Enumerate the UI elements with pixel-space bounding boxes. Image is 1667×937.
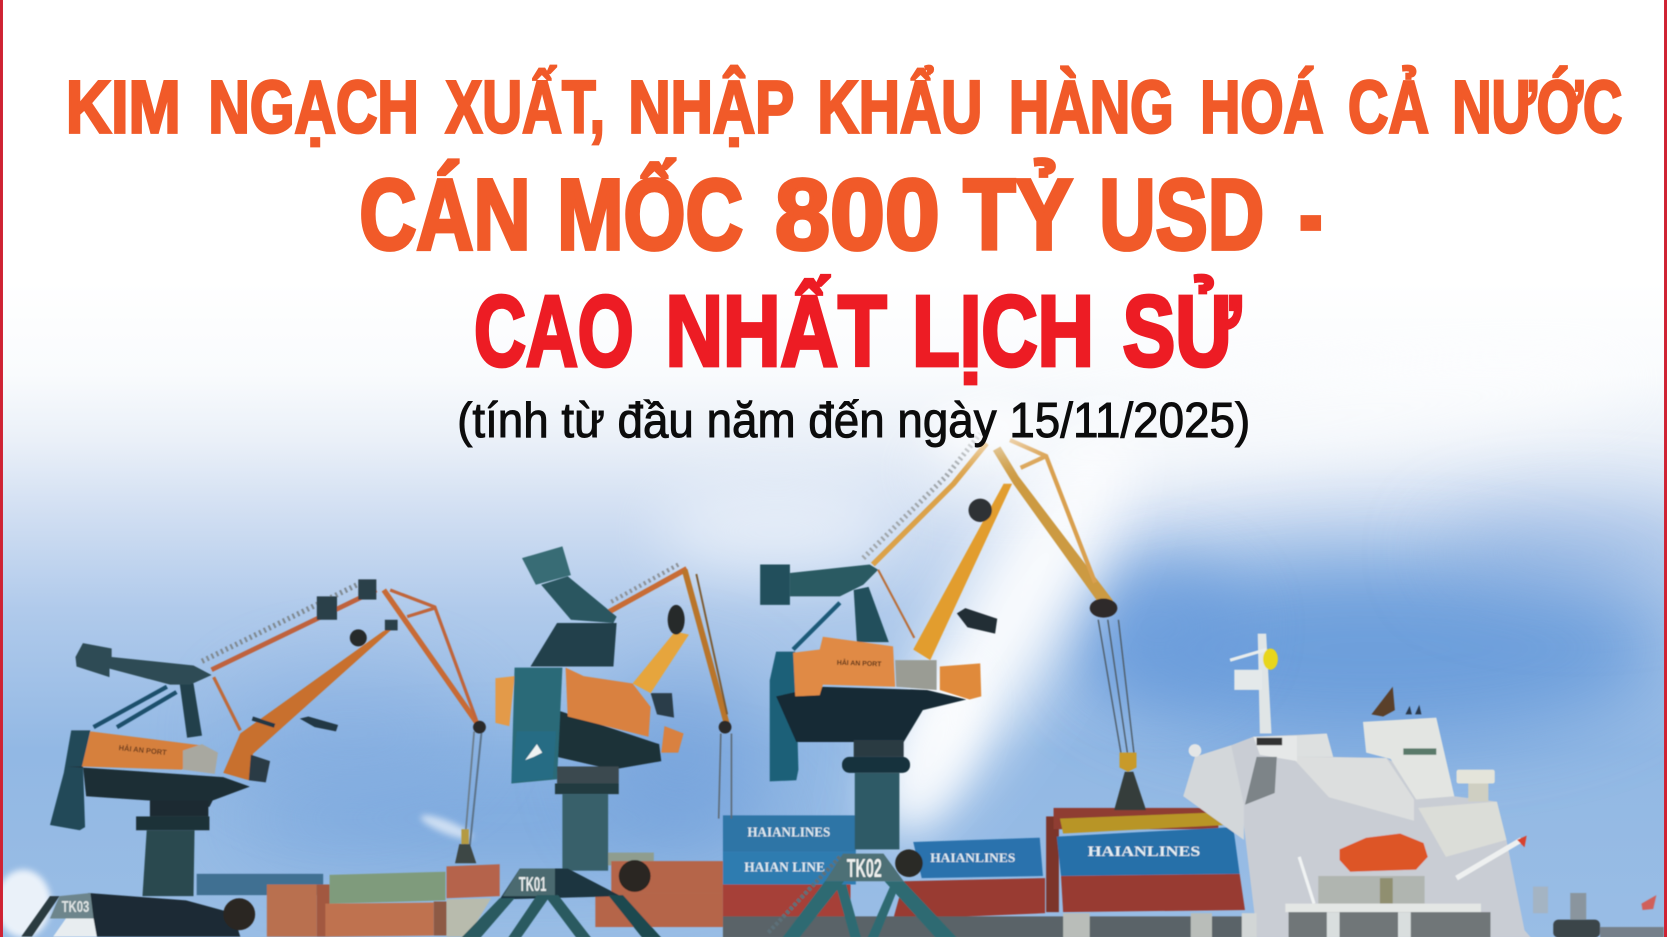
haze over crane tip xyxy=(928,402,1045,453)
title line 1: HÀNG xyxy=(1009,65,1174,148)
title line 2 xyxy=(359,159,1323,271)
title line 1 xyxy=(66,65,1622,148)
title line 1: NGẠCH xyxy=(208,65,419,148)
date subtitle: (tính từ đầu năm đến ngày 15/11/2025) xyxy=(457,394,1250,448)
title line 3: SỬ xyxy=(1123,276,1241,388)
title line 3: CAO xyxy=(474,277,634,388)
title line 2: - xyxy=(1299,160,1323,271)
title line 1: KHẨU xyxy=(818,65,982,148)
title line 2: CÁN xyxy=(359,159,531,271)
crane 2 xyxy=(461,546,731,937)
title line 1: XUẤT, xyxy=(445,65,605,148)
title line 1: HOÁ xyxy=(1200,65,1324,148)
containers and quay: HAIANLINES xyxy=(1088,844,1200,860)
left red edge xyxy=(0,0,3,937)
right red edge xyxy=(1664,0,1667,937)
title line 2: 800 xyxy=(775,160,940,271)
title line 2: TỶ xyxy=(963,159,1073,271)
containers and quay: HAIANLINES xyxy=(930,851,1015,865)
crane 3 xyxy=(760,434,1146,937)
containers and quay: HAIANLINES xyxy=(747,825,831,840)
title line 2: MỐC xyxy=(557,159,743,271)
crane 2: TK01 xyxy=(519,874,546,896)
cargo ship xyxy=(1183,634,1664,937)
crane 1: TK03 xyxy=(62,899,89,916)
containers and quay: HAIAN LINE xyxy=(744,860,825,875)
title line 1: KIM xyxy=(66,65,181,148)
title line 1: NHẬP xyxy=(628,65,794,148)
crane 3: HẢI AN PORT xyxy=(837,658,882,668)
title line 2: USD xyxy=(1099,160,1264,271)
port scene xyxy=(21,434,1664,937)
title line 1: CẢ xyxy=(1348,65,1429,148)
title line 3: NHẤT xyxy=(666,275,887,388)
crane 3: TK02 xyxy=(847,855,882,883)
title line 3: LỊCH xyxy=(912,277,1094,388)
title line 3 xyxy=(474,275,1241,388)
crane 1: HẢI AN PORT xyxy=(118,743,168,757)
crane 1 xyxy=(21,579,486,937)
containers and quay xyxy=(197,808,1255,937)
